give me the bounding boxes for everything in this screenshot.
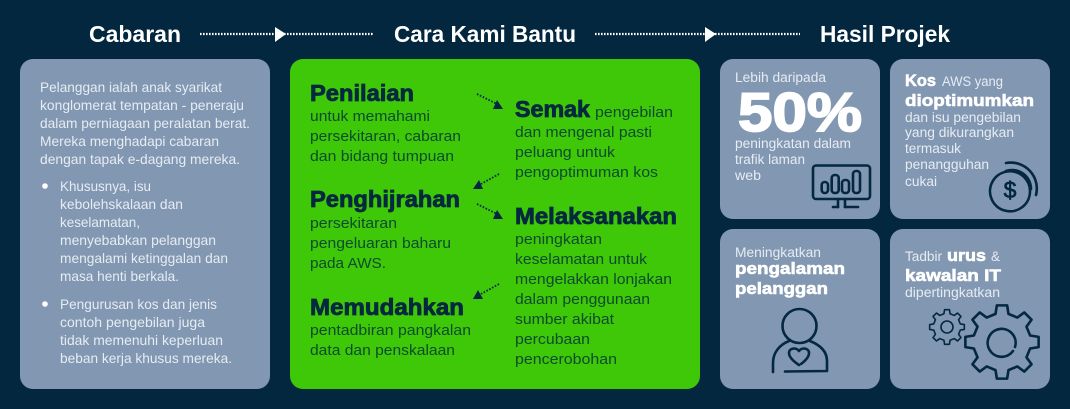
step: Melaksanakan: mengelakkan lonjakan xyxy=(515,271,672,288)
step: Melaksanakan xyxy=(515,203,677,368)
bullet one xyxy=(42,178,228,284)
step: Melaksanakan: keselamatan untuk xyxy=(515,251,648,268)
step: Melaksanakan: peningkatan xyxy=(515,231,602,248)
card: IT governance: & xyxy=(991,249,1000,264)
card: 50% traffic: trafik laman xyxy=(735,152,805,167)
arrow: Cabaran to Cara Kami Bantu xyxy=(200,27,374,42)
card: AWS cost: termasuk xyxy=(905,141,961,156)
icon: person with heart xyxy=(773,309,827,372)
intro text: dengan tapak e-dagang mereka. xyxy=(40,151,240,167)
step: Penilaian: untuk memahami xyxy=(310,108,430,125)
bullet two: tidak memenuhi keperluan xyxy=(60,332,223,348)
step: Semak: dan mengenal pasti xyxy=(515,124,652,141)
card: IT governance: dipertingkatkan xyxy=(905,285,1000,300)
step: Memudahkan xyxy=(310,294,471,359)
intro text xyxy=(40,79,250,167)
stat: 50%: 50% xyxy=(738,81,862,143)
panel: Cara Kami Bantu xyxy=(290,59,700,389)
card: AWS cost: dan isu pengebilan xyxy=(905,110,1021,125)
intro text: Pelanggan ialah anak syarikat xyxy=(40,79,222,95)
step: Semak: pengoptimuman kos xyxy=(515,164,658,181)
step: Memudahkan: Memudahkan xyxy=(310,294,464,320)
step: Penghijrahan: persekitaran xyxy=(310,215,397,232)
icon: gears xyxy=(930,305,1039,379)
bullet one: masa henti berkala. xyxy=(60,268,179,284)
bullet two: contoh pengebilan juga xyxy=(60,314,205,330)
card: customer experience xyxy=(720,229,880,389)
bullet two: Pengurusan kos dan jenis xyxy=(60,296,217,312)
arrow: to Memudahkan xyxy=(473,284,499,299)
card: 50% traffic: web xyxy=(734,168,761,183)
arrow: Cara Kami Bantu to Hasil Projek xyxy=(595,27,800,42)
card: 50% traffic xyxy=(720,59,880,219)
arrow: to Melaksanakan xyxy=(477,204,503,219)
step: Melaksanakan: pencerobohan xyxy=(515,351,617,368)
card: IT governance: urus xyxy=(947,246,986,265)
arrow: to Penghijrahan xyxy=(473,174,499,189)
card: AWS cost: penangguhan xyxy=(905,157,989,172)
card: AWS cost: cukai xyxy=(905,174,937,189)
intro text: Mereka menghadapi cabaran xyxy=(40,133,219,149)
step: Semak xyxy=(515,96,673,181)
card: AWS cost: dioptimumkan xyxy=(905,91,1034,110)
step: Penghijrahan: pengeluaran baharu xyxy=(310,235,451,252)
card: IT governance: Tadbir xyxy=(905,249,942,264)
step: Penghijrahan: pada AWS. xyxy=(310,255,386,272)
card: customer experience: pelanggan xyxy=(735,279,828,298)
bullet one: menyebabkan pelanggan xyxy=(60,232,216,248)
bullet one: mengalami ketinggalan dan xyxy=(60,250,228,266)
card: customer experience: Meningkatkan xyxy=(735,245,821,260)
step: Semak: peluang untuk xyxy=(515,144,616,161)
card: AWS cost xyxy=(890,59,1050,219)
step: Melaksanakan: percubaan xyxy=(515,331,590,348)
card: 50% traffic: peningkatan dalam xyxy=(735,136,851,151)
bullet two xyxy=(42,296,232,366)
step: Semak: Semak xyxy=(515,96,590,122)
icon: coins: $ xyxy=(1004,177,1017,203)
heading: Cabaran: Cabaran xyxy=(89,21,181,47)
heading: Hasil Projek: Hasil Projek xyxy=(820,21,950,47)
step: Semak: pengebilan xyxy=(595,104,673,121)
step: Penghijrahan: Penghijrahan xyxy=(310,186,460,212)
intro text: dalam perniagaan peralatan berat. xyxy=(40,115,250,131)
step: Memudahkan: pentadbiran pangkalan xyxy=(310,322,471,339)
step: Penghijrahan xyxy=(310,186,460,272)
heading: Cara Kami Bantu: Cara Kami Bantu xyxy=(394,21,576,47)
card: 50% traffic: Lebih daripada xyxy=(735,70,826,85)
step: Melaksanakan: dalam penggunaan xyxy=(515,291,650,308)
icon: monitor with bar chart xyxy=(813,166,870,207)
card: AWS cost: Kos xyxy=(905,71,936,90)
step: Melaksanakan: sumber akibat xyxy=(515,311,615,328)
card: IT governance: kawalan IT xyxy=(905,266,1002,285)
bullet one: Khususnya, isu xyxy=(60,178,151,194)
card: IT governance xyxy=(890,229,1050,389)
panel: Cabaran xyxy=(20,59,270,389)
bullet one: kebolehskalaan dan xyxy=(60,196,183,212)
bullet one: keselamatan, xyxy=(60,214,140,230)
card: AWS cost: AWS yang xyxy=(942,74,1003,89)
icon: coins xyxy=(990,163,1037,211)
step: Memudahkan: data dan penskalaan xyxy=(310,342,455,359)
step: Penilaian: persekitaran, cabaran xyxy=(310,128,461,145)
card: AWS cost: yang dikurangkan xyxy=(905,125,1014,140)
step: Penilaian xyxy=(310,80,461,165)
intro text: konglomerat tempatan - peneraju xyxy=(40,97,244,113)
card: customer experience: pengalaman xyxy=(735,259,845,278)
bullet two: beban kerja khusus mereka. xyxy=(60,350,232,366)
arrow: to Semak xyxy=(477,94,503,109)
step: Penilaian: dan bidang tumpuan xyxy=(310,148,454,165)
step: Melaksanakan: Melaksanakan xyxy=(515,203,677,229)
step: Penilaian: Penilaian xyxy=(310,80,414,106)
